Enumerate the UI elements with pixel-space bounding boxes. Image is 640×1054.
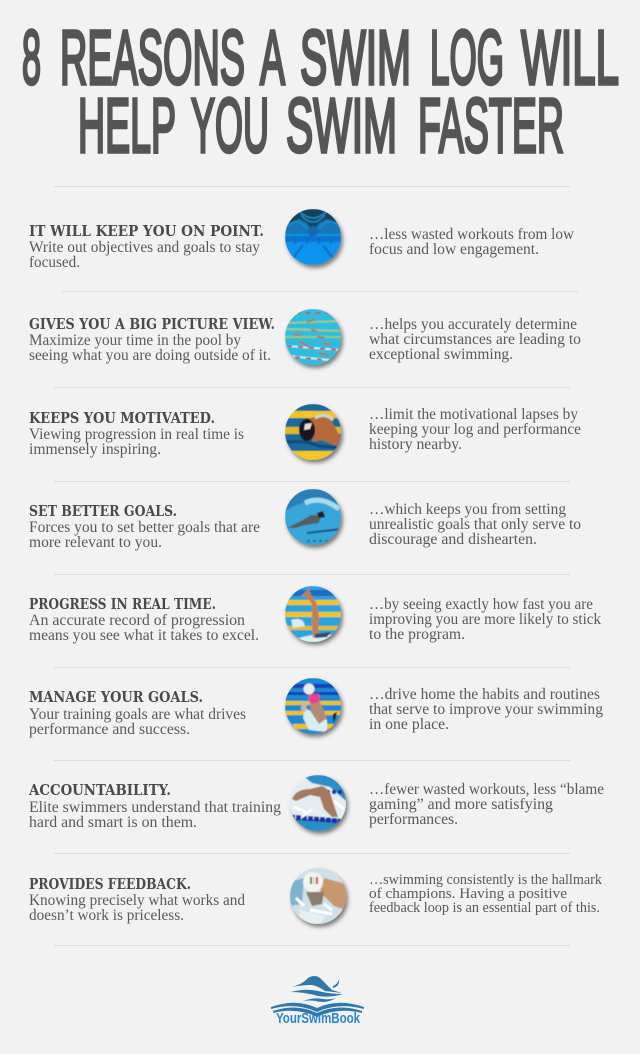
reason 4 result — [369, 501, 581, 548]
title — [22, 15, 619, 169]
reason 1 text — [29, 222, 264, 271]
title: YOU — [191, 83, 269, 169]
reason 1 text: IT WILL KEEP YOU ON POINT. — [29, 222, 264, 240]
reason 4 text: more relevant to you. — [29, 534, 162, 551]
logo wordmark: YourSwimBook — [276, 1011, 361, 1027]
panel: reason 6 — [29, 678, 603, 738]
reason 5 text: PROGRESS IN REAL TIME. — [29, 595, 216, 613]
reason 4 result: unrealistic goals that only serve to — [369, 516, 581, 533]
reason 8 text: Knowing precisely what works and — [29, 892, 245, 909]
reason 1 text: Write out objectives and goals to stay — [29, 239, 260, 256]
reason 7 text: hard and smart is on them. — [29, 814, 197, 831]
reason 8 result: feedback loop is an essential part of this. — [369, 900, 600, 916]
reason 5 result: …by seeing exactly how fast you are — [369, 596, 593, 613]
reason 5 text: An accurate record of progression — [29, 612, 245, 629]
reason 6 result: that serve to improve your swimming — [369, 701, 603, 718]
reason 8 result — [369, 872, 602, 916]
title: SWIM — [286, 83, 397, 169]
reason 7 result — [369, 781, 604, 828]
reason 6 result — [369, 686, 603, 733]
reason 3 result: …limit the motivational lapses by — [369, 406, 578, 423]
title: A — [260, 15, 285, 101]
reason 6 result: in one place. — [369, 716, 449, 733]
reason 8 text: PROVIDES FEEDBACK. — [29, 875, 191, 893]
icon: underwater swimmer — [285, 489, 341, 545]
reason 6 text: performance and success. — [29, 721, 190, 738]
reason 3 result: keeping your log and performance — [369, 421, 581, 438]
icon: backstroke arm — [285, 586, 341, 642]
reason 4 result: …which keeps you from setting — [369, 501, 566, 518]
reason 7 result: …fewer wasted workouts, less “blame — [369, 781, 604, 798]
panel: reason 3 — [29, 404, 581, 460]
reason 5 result — [369, 596, 601, 643]
reason 8 text: doesn’t work is priceless. — [29, 907, 184, 924]
icon: swimmer in pink suit — [285, 678, 341, 734]
reason 6 text: MANAGE YOUR GOALS. — [29, 688, 203, 706]
reason 3 text — [29, 409, 244, 458]
icon: pool from above — [285, 309, 341, 365]
reason 3 result: history nearby. — [369, 436, 462, 453]
panel: reason 4 — [29, 489, 581, 551]
reason 7 text: Elite swimmers understand that training — [29, 799, 281, 816]
reason 2 text: Maximize your time in the pool by — [29, 332, 241, 349]
icon: pool underwater — [285, 209, 341, 265]
reason 7 text — [28, 781, 281, 831]
title: SWIM — [300, 15, 411, 101]
logo: YourSwimBook — [271, 976, 364, 1027]
reason 1 result: focus and low engagement. — [369, 241, 539, 258]
panel: reason 8 — [29, 868, 602, 924]
reason 8 text — [29, 875, 245, 924]
reason 2 result: what circumstances are leading to — [369, 331, 581, 348]
reason 3 result — [369, 406, 581, 453]
panel: reason 5 — [29, 586, 601, 644]
reason 2 result: …helps you accurately determine — [369, 316, 577, 333]
reason 7 text: ACCOUNTABILITY. — [28, 781, 171, 799]
reason 8 result: …swimming consistently is the hallmark — [369, 872, 602, 888]
reason 3 text: KEEPS YOU MOTIVATED. — [29, 409, 215, 427]
panel: reason 7 — [28, 775, 604, 831]
reason 3 text: Viewing progression in real time is — [29, 426, 244, 443]
icon: swimmer over open book — [271, 976, 364, 1017]
reason 6 text — [29, 688, 246, 738]
reason 5 text — [29, 595, 259, 644]
icon: freestyle swimmer splash — [290, 775, 346, 831]
title: REASONS — [60, 15, 245, 101]
reason 4 text — [29, 502, 260, 551]
reason 3 text: immensely inspiring. — [29, 441, 161, 458]
reason 4 text: SET BETTER GOALS. — [29, 502, 177, 520]
reason 1 result: …less wasted workouts from low — [369, 226, 574, 243]
reason 4 text: Forces you to set better goals that are — [29, 519, 260, 536]
reason 8 result: of champions. Having a positive — [369, 886, 567, 902]
reason 2 text — [29, 315, 275, 364]
title: LOG — [430, 15, 504, 101]
reason 5 result: to the program. — [369, 626, 465, 643]
reason 7 result: performances. — [369, 811, 458, 828]
icon: swimmer in white cap — [290, 868, 346, 924]
reason 5 result: improving you are more likely to stick — [369, 611, 601, 628]
panel: reason 1 — [29, 209, 574, 271]
title: HELP — [78, 83, 176, 169]
reason 6 result: …drive home the habits and routines — [369, 686, 600, 703]
reason 6 text: Your training goals are what drives — [29, 706, 246, 723]
title: 8 — [22, 15, 41, 101]
reason 5 text: means you see what it takes to excel. — [29, 627, 259, 644]
reason 4 result: discourage and dishearten. — [369, 531, 537, 548]
reason 2 text: GIVES YOU A BIG PICTURE VIEW. — [29, 315, 275, 333]
reason 2 text: seeing what you are doing outside of it. — [29, 347, 271, 364]
reason 2 result — [369, 316, 581, 363]
reason 7 result: gaming” and more satisfying — [369, 796, 553, 813]
icon: swimmer in black cap — [285, 404, 341, 460]
reason 1 result — [369, 226, 574, 258]
panel: reason 2 — [29, 309, 581, 365]
reason 2 result: exceptional swimming. — [369, 346, 513, 363]
reason 1 text: focused. — [29, 254, 80, 271]
